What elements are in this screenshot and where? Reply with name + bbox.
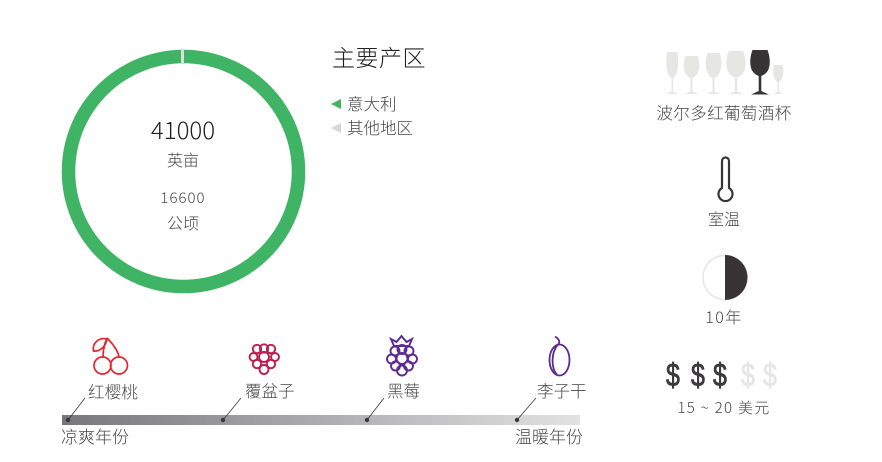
icon: price dollar signs: $ [713, 358, 727, 394]
legend: other regions: 其他地区 [347, 115, 413, 139]
scale markers with leader lines [66, 398, 536, 422]
icon: price dollar signs [666, 358, 777, 394]
icon: price dollar signs: $ [691, 358, 705, 394]
donut centre text: area [151, 111, 215, 234]
icon: price dollar signs: $ [666, 358, 680, 394]
icon: cherry [93, 338, 128, 374]
icon: half-filled circle [703, 255, 748, 300]
label: red cherry: 红樱桃 [88, 379, 138, 403]
icon: prune [550, 336, 570, 376]
icon: price dollar signs: $ [741, 358, 755, 394]
label: dried plum: 李子干 [537, 378, 586, 402]
label: warm years: 温暖年份 [515, 423, 583, 448]
donut centre text: area: 公顷 [167, 210, 199, 234]
icon: wine glasses [666, 50, 783, 94]
label: blackberry: 黑莓 [387, 378, 420, 402]
donut chart: production area [68, 49, 298, 286]
label: cool years: 凉爽年份 [61, 423, 129, 448]
icon: thermometer [718, 158, 732, 201]
legend: Italy: 意大利 [347, 91, 396, 115]
label: price range: 15 ~ 20 美元 [677, 397, 771, 418]
label: room temperature: 室温 [708, 206, 740, 230]
donut centre text: area: 41000 [151, 111, 215, 146]
label: raspberry: 覆盆子 [245, 378, 294, 402]
donut centre text: area: 16600 [160, 187, 206, 208]
label: ageing years: 10年 [705, 304, 743, 328]
donut centre text: area: 英亩 [167, 147, 199, 171]
icon: price dollar signs: $ [763, 358, 777, 394]
flavour scale gradient bar [62, 415, 580, 425]
heading: main regions: 主要产区 [332, 39, 426, 73]
icon: raspberry [250, 344, 279, 374]
icon: blackberry [387, 336, 417, 376]
label: Bordeaux glass: 波尔多红葡萄酒杯 [656, 100, 792, 124]
